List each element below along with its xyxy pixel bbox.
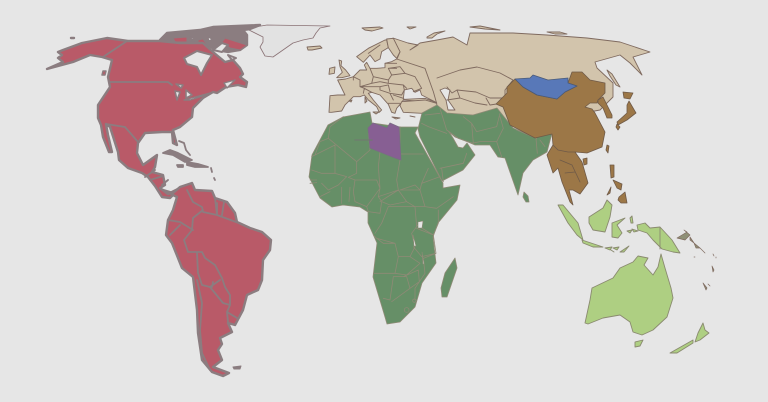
Alaska, Canada, USA, Mexico, Central America: [47, 38, 247, 198]
Java: [582, 240, 603, 247]
Melanesian islands: [677, 230, 716, 290]
national borders: [168, 190, 237, 370]
Madagascar: [441, 258, 457, 297]
New Zealand: [695, 323, 709, 342]
Korea: [598, 97, 612, 118]
Falkland island: [233, 366, 241, 369]
Middle East and South Asia: [418, 105, 552, 195]
China and Southeast Asia mainland: [496, 72, 605, 205]
Visayas: [613, 180, 622, 190]
Australia: [585, 254, 673, 335]
Vancouver island: [102, 71, 106, 75]
Hainan: [583, 158, 587, 165]
New Guinea border: [659, 228, 661, 249]
Caspian Sea: [440, 88, 455, 110]
region: Europe and Central Asia: [307, 26, 650, 125]
Luzon: [610, 165, 614, 178]
Mediterranean islands: [349, 97, 415, 119]
national borders: [103, 41, 172, 185]
Palawan: [607, 187, 611, 195]
Russia and Asian mainland: [393, 33, 650, 125]
Arctic islands: [362, 26, 567, 38]
Finland: [387, 38, 400, 58]
Taiwan: [606, 145, 609, 153]
Turkey: [400, 100, 437, 113]
Africa country borders: [310, 117, 453, 312]
Black Sea: [403, 88, 437, 103]
Sri Lanka: [523, 192, 529, 202]
Mindanao: [618, 192, 627, 203]
Aleutian island: [71, 37, 74, 39]
Kyushu: [616, 124, 620, 130]
European country borders: [353, 45, 422, 103]
African lakes: [413, 221, 424, 264]
Tasmania: [635, 340, 643, 347]
Lesser Sunda islands: [605, 216, 638, 252]
region: South America: [163, 183, 271, 376]
Caribbean islands: [163, 141, 215, 180]
region: Mongolia: [515, 75, 577, 99]
country borders: Central Asia: [437, 67, 513, 105]
region: North Africa to South Asia: [309, 105, 552, 324]
Iceland: [307, 46, 322, 50]
region: North America: [47, 25, 260, 198]
Sakhalin: [607, 70, 620, 87]
region: Libya: [368, 123, 401, 160]
Arctic islands: [222, 38, 247, 50]
region: East Asia: [496, 72, 636, 205]
Ireland: [329, 67, 335, 74]
Europe mainland: [329, 38, 437, 113]
Borneo: [589, 200, 612, 232]
Arctic archipelago: [160, 25, 260, 52]
region: Oceania: [558, 200, 709, 353]
Sumatra: [558, 205, 583, 240]
Sulawesi: [612, 218, 625, 238]
Norway and Sweden: [357, 40, 388, 62]
line marker on Libya: [355, 139, 372, 141]
Great Britain: [337, 60, 350, 78]
Asia country borders: [422, 108, 545, 182]
Africa: [309, 112, 460, 324]
water: Hudson Bay, St Lawrence and Great Lakes: [175, 37, 236, 100]
Southeast Asia borders: [553, 145, 580, 182]
Hokkaido: [623, 92, 633, 99]
region: Greenland: [247, 25, 330, 57]
Honshu: [617, 101, 636, 125]
New Guinea: [637, 223, 680, 253]
